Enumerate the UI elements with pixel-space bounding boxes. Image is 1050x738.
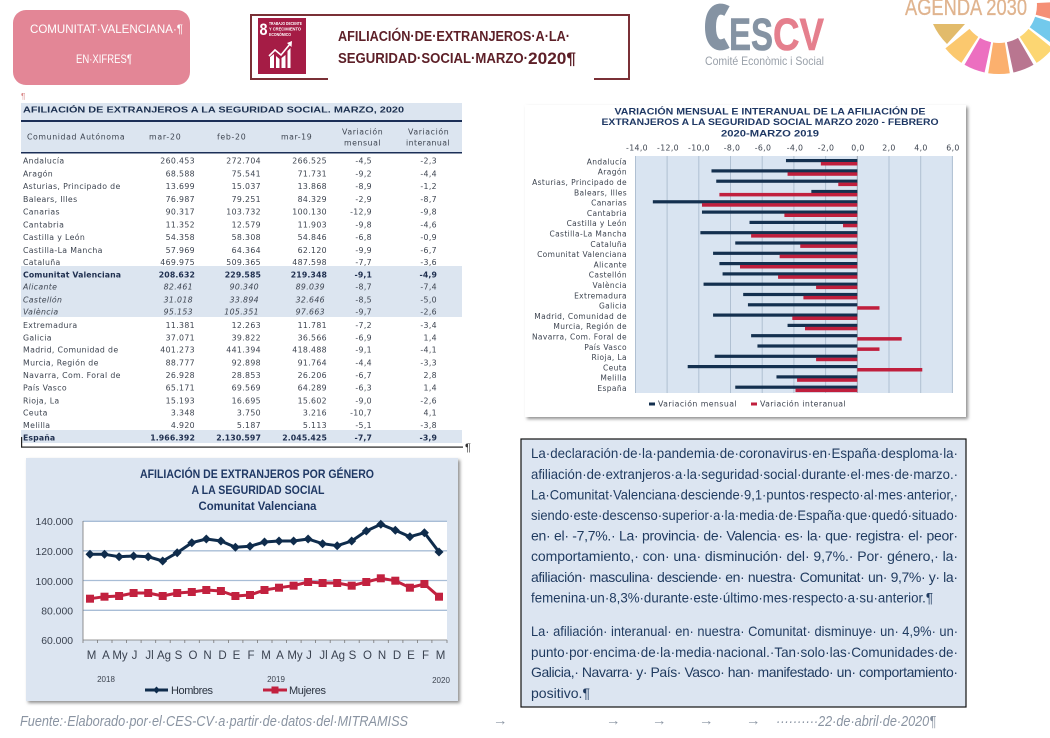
table rows: 68.588 xyxy=(166,169,195,178)
table rows: -3,3 xyxy=(420,359,437,368)
chart title: VARIACIÓN MENSUAL E INTERANUAL DE LA AFILIACIÓN DE xyxy=(614,106,926,118)
table rows: -5,0 xyxy=(420,295,437,304)
month labels: F xyxy=(247,650,255,662)
heading: AFILIACIÓN·DE·EXTRANJEROS·A·LA· xyxy=(338,27,570,45)
chart title: EXTRANJEROS A LA SEGURIDAD SOCIAL MARZO 2020 - FEBRERO xyxy=(602,117,938,128)
table rows: -9,1 xyxy=(355,346,372,355)
table rows: 2.130.597 xyxy=(216,434,261,443)
table rows: -6,7 xyxy=(420,246,437,255)
text block: analysis: siendo·este·descenso·superior·a·la·media·de·España·que·quedó·situado· xyxy=(531,507,958,523)
table rows: Castilla-La Mancha xyxy=(23,246,103,255)
table rows: -4,6 xyxy=(420,220,437,229)
panel: bar chart of monthly and year-on-year variation xyxy=(525,105,968,419)
month labels: D xyxy=(218,650,227,662)
category labels: València xyxy=(593,281,627,290)
footer: source and date: → xyxy=(493,713,508,729)
table rows: -3,4 xyxy=(420,321,437,330)
y axis labels: 100.000 xyxy=(35,577,73,588)
table rows: País Vasco xyxy=(23,384,67,393)
table rows: -0,9 xyxy=(420,233,437,242)
category labels: Cantabria xyxy=(587,209,627,218)
table rows: 89.039 xyxy=(296,283,325,292)
table rows: 65.171 xyxy=(166,384,195,393)
table header: Variación xyxy=(342,128,383,136)
table rows: -9,7 xyxy=(355,308,372,317)
category labels: Balears, Illes xyxy=(574,188,627,197)
table rows: Castilla y León xyxy=(23,233,85,242)
table rows: 88.777 xyxy=(166,359,195,368)
table rows: 64.289 xyxy=(298,384,327,393)
month labels: My xyxy=(112,650,128,662)
table rows: 418.488 xyxy=(292,346,327,355)
month labels: O xyxy=(363,650,372,662)
table rows: -6,8 xyxy=(355,233,372,242)
table rows: 3.216 xyxy=(303,409,327,418)
table rows: Cantabria xyxy=(23,220,64,229)
y axis labels: 120.000 xyxy=(35,547,73,558)
table rows: 64.364 xyxy=(232,246,261,255)
plot area xyxy=(83,521,447,640)
month labels: S xyxy=(175,650,183,662)
category labels: Ceuta xyxy=(603,363,627,372)
table rows: 100.130 xyxy=(292,208,327,216)
icon: SDG 8 decent work and economic growth xyxy=(258,18,306,74)
table rows: Alicante xyxy=(22,283,57,292)
table rows: 71.731 xyxy=(298,169,327,178)
table: afiliación por comunidad autónoma: ¶ xyxy=(465,442,471,454)
table rows: 441.394 xyxy=(226,346,261,355)
table rows: 11.381 xyxy=(166,321,195,330)
table rows: Andalucía xyxy=(23,156,64,166)
table rows: 90.317 xyxy=(166,208,195,216)
y axis labels: 140.000 xyxy=(35,517,73,528)
chart title: Comunitat Valenciana xyxy=(198,501,317,513)
category labels: Aragón xyxy=(598,168,627,177)
table header: mar-20 xyxy=(149,132,181,142)
x axis labels: 4,0 xyxy=(914,144,928,152)
y axis labels xyxy=(35,517,73,647)
table rows: 5.113 xyxy=(303,421,327,430)
table rows: -9,8 xyxy=(355,220,372,229)
table rows: -10,7 xyxy=(350,409,372,418)
month labels xyxy=(87,650,445,662)
category labels: Navarra, Com. Foral de xyxy=(532,332,627,342)
table rows: 272.704 xyxy=(226,156,261,166)
table rows: 82.461 xyxy=(164,283,193,292)
table rows: -7,7 xyxy=(355,258,372,267)
table rows: Ceuta xyxy=(23,409,48,418)
month labels: N xyxy=(203,650,212,662)
footer: source and date xyxy=(20,713,936,730)
text block: analysis: La·Comunitat·Valenciana·desciende·9,1·puntos·respecto·al·mes·anterior,· xyxy=(531,486,958,502)
table rows: 15.037 xyxy=(232,182,261,191)
table rows: 26.206 xyxy=(298,371,327,380)
table rows: 260.453 xyxy=(160,156,195,166)
text block: analysis: comportamiento,· con· una· disminución· del· 9,7%.· Por· género,· la· xyxy=(531,548,958,564)
footer: source and date: → xyxy=(606,713,620,729)
table rows: España xyxy=(23,434,55,443)
category labels: Castilla y León xyxy=(567,219,627,228)
month labels: N xyxy=(378,650,386,662)
table rows: Asturias, Principado de xyxy=(23,182,121,191)
table rows: -3,9 xyxy=(420,434,437,443)
table rows: Extremadura xyxy=(23,321,78,330)
logo: CESCV: ES xyxy=(729,9,773,60)
month labels: S xyxy=(349,650,357,662)
category labels: Madrid, Comunidad de xyxy=(534,312,627,321)
y axis labels: 60.000 xyxy=(41,636,73,647)
table rows: 32.646 xyxy=(296,295,325,304)
month labels: M xyxy=(436,650,445,662)
table rows: -9,1 xyxy=(355,270,372,279)
table rows: Aragón xyxy=(23,169,53,178)
panel: line chart by gender xyxy=(26,458,460,703)
table rows: 15.193 xyxy=(166,397,195,406)
text block: analysis: femenina·un·8,3%·durante·este·último·mes·respecto·a·su·anterior.¶ xyxy=(531,590,933,606)
table rows: -4,4 xyxy=(355,359,372,368)
plot area xyxy=(636,156,953,393)
month labels: D xyxy=(393,650,401,662)
icon: SDG 8 decent work and economic growth: ECONÓMICO xyxy=(269,32,292,37)
x axis labels: 6,0 xyxy=(946,144,960,152)
footer: source and date: → xyxy=(699,713,714,729)
category labels: Asturias, Principado de xyxy=(532,178,627,187)
table rows: 37.071 xyxy=(166,334,195,343)
logo: Agenda 2030 wheel xyxy=(905,0,1050,74)
table rows: Balears, Illes xyxy=(23,195,77,204)
table header: Variación xyxy=(408,128,449,136)
table rows: 12.263 xyxy=(232,321,261,330)
table rows: 97.663 xyxy=(296,308,325,317)
table rows: 11.352 xyxy=(166,220,195,229)
table rows: Cataluña xyxy=(23,258,61,267)
table rows: -8,7 xyxy=(420,195,437,204)
table rows: -7,7 xyxy=(355,434,372,443)
table rows: 92.898 xyxy=(232,359,261,368)
year labels xyxy=(97,675,450,685)
table rows: 54.846 xyxy=(298,233,327,242)
table rows: 79.251 xyxy=(232,195,261,204)
table rows: 16.695 xyxy=(232,397,261,406)
table rows: 75.541 xyxy=(232,169,261,178)
table: afiliación por comunidad autónoma xyxy=(21,103,471,454)
icon: SDG 8 decent work and economic growth: Y CRECIMIENTO xyxy=(269,26,302,32)
table rows: 219.348 xyxy=(291,270,327,279)
heading: SEGURIDAD·SOCIAL·MARZO· xyxy=(338,51,528,67)
logo: CESCV: CV xyxy=(773,9,824,60)
badge: Comunitat Valenciana en xifres xyxy=(13,10,190,85)
month labels: Jl xyxy=(145,650,154,662)
chart legend xyxy=(145,685,326,697)
table rows: 84.329 xyxy=(298,195,327,204)
chart title: A LA SEGURIDAD SOCIAL xyxy=(192,485,324,497)
table rows: -3,8 xyxy=(420,421,437,430)
table rows: Castellón xyxy=(23,295,62,304)
paragraph mark: ¶ xyxy=(21,92,25,101)
text block: analysis xyxy=(521,439,966,707)
table rows: Melilla xyxy=(23,421,50,430)
category labels: Murcia, Región de xyxy=(553,322,627,331)
heading: 2020¶ xyxy=(528,49,576,68)
table rows: Comunitat Valenciana xyxy=(23,270,121,279)
bars: variación mensual xyxy=(653,159,857,389)
chart title xyxy=(140,468,374,513)
bars: variación interanual xyxy=(702,162,922,392)
month labels: J xyxy=(132,650,137,662)
month labels: A xyxy=(276,650,284,662)
icon: SDG 8 decent work and economic growth: 8 xyxy=(260,20,268,39)
x axis labels: -12,0 xyxy=(657,144,679,152)
month labels: M xyxy=(261,650,271,662)
table header: interanual xyxy=(406,138,450,148)
badge: Comunitat Valenciana en xifres: COMUNITAT·VALENCIANA·¶ xyxy=(30,22,183,36)
table rows: 487.598 xyxy=(292,258,327,267)
x axis labels: 2,0 xyxy=(882,144,896,152)
x axis labels: -2,0 xyxy=(818,144,834,152)
text block: analysis: en· el· -7,7%.· La· provincia· de· Valencia· es· la· que· registra· el· peor· xyxy=(531,528,958,544)
table rows: -9,8 xyxy=(420,208,437,216)
table rows: 90.340 xyxy=(230,283,259,292)
category labels: País Vasco xyxy=(584,343,627,352)
logo: CESCV: Comité Econòmic i Social xyxy=(705,54,824,68)
table header: mar-19 xyxy=(281,132,312,142)
table rows: Murcia, Región de xyxy=(23,359,99,368)
table rows: -8,5 xyxy=(355,295,372,304)
table rows: 31.018 xyxy=(164,295,193,304)
year labels: 2020 xyxy=(432,676,450,685)
table rows: 91.764 xyxy=(298,359,327,368)
table rows: 1,4 xyxy=(424,334,437,343)
x axis labels xyxy=(626,144,960,152)
chart title: AFILIACIÓN DE EXTRANJEROS POR GÉNERO xyxy=(140,468,374,481)
badge: Comunitat Valenciana en xifres: EN·XIFRES¶ xyxy=(76,54,132,66)
table rows: 229.585 xyxy=(225,270,261,279)
table rows: 26.928 xyxy=(166,371,195,380)
table rows: 2.045.425 xyxy=(282,434,327,443)
table rows: -6,7 xyxy=(355,371,372,380)
table rows: Rioja, La xyxy=(23,397,60,406)
table rows: -8,9 xyxy=(355,182,372,191)
table rows: 76.987 xyxy=(166,195,195,204)
x axis labels: -8,0 xyxy=(724,144,740,152)
icon: SDG 8 decent work and economic growth: TRABAJO DECENTE xyxy=(269,21,302,26)
table rows: 3.348 xyxy=(171,409,195,418)
table rows: 103.732 xyxy=(226,208,261,216)
table rows: -7,4 xyxy=(420,283,437,292)
table header: mensual xyxy=(344,138,381,148)
table rows: Madrid, Comunidad de xyxy=(23,346,118,355)
chart legend xyxy=(649,400,846,408)
month labels: M xyxy=(87,650,96,662)
chart legend: Mujeres xyxy=(289,685,326,697)
chart legend: Variación mensual xyxy=(658,400,737,408)
table rows: Galicia xyxy=(23,334,52,343)
table rows: -2,6 xyxy=(420,397,437,406)
table rows: 266.525 xyxy=(292,156,327,166)
table rows: 15.602 xyxy=(298,397,327,406)
chart title xyxy=(602,106,938,140)
table rows: 11.903 xyxy=(298,220,327,229)
table rows: -9,2 xyxy=(355,169,372,178)
category labels: Castellón xyxy=(589,271,627,280)
text block: analysis: La· afiliación· interanual· en· nuestra· Comunitat· disminuye· un· 4,9%· un· xyxy=(531,623,958,639)
table rows: -5,1 xyxy=(355,421,372,430)
footer: source and date: Fuente:·Elaborado·por·el·CES-CV·a·partir·de·datos·del·MITRAMISS xyxy=(20,714,408,730)
table rows: -4,9 xyxy=(420,270,437,279)
table rows: -12,9 xyxy=(350,208,372,216)
x axis labels: -4,0 xyxy=(787,144,803,152)
text block: analysis: positivo.¶ xyxy=(531,685,590,701)
table rows: 1.966.392 xyxy=(150,434,195,443)
table rows: 105.351 xyxy=(224,308,259,317)
category labels: Castilla-La Mancha xyxy=(549,230,627,238)
table title: AFILIACIÓN DE EXTRANJEROS A LA SEGURIDAD SOCIAL. MARZO, 2020 xyxy=(23,104,404,114)
table rows: Canarias xyxy=(23,208,60,216)
text block: analysis: Galicia,· Navarra· y· País· Vasco· han· manifestado· un· comportamiento· xyxy=(531,664,958,680)
month labels: E xyxy=(233,650,241,662)
table rows: 33.894 xyxy=(230,295,259,304)
table rows: 62.120 xyxy=(298,246,327,255)
logo: CESCV xyxy=(705,9,824,68)
text block: analysis: afiliación·de·extranjeros·a·la·seguridad·social·durante·el·mes·de·marzo.· xyxy=(531,466,958,482)
month labels: Ag xyxy=(157,650,171,662)
month labels: A xyxy=(102,650,110,662)
table rows: -1,2 xyxy=(420,182,437,191)
table rows: 1,4 xyxy=(424,384,437,393)
table rows: 4,1 xyxy=(424,409,437,418)
table rows: 13.699 xyxy=(166,182,195,191)
table rows: 509.365 xyxy=(226,258,261,267)
table rows: -8,7 xyxy=(355,283,372,292)
month labels: O xyxy=(189,650,198,662)
table header: Comunidad Autónoma xyxy=(27,132,125,142)
category labels xyxy=(532,157,627,393)
chart title: 2020-MARZO 2019 xyxy=(721,128,819,140)
x axis labels: 0,0 xyxy=(851,144,865,152)
footer: source and date: → xyxy=(746,713,760,729)
table rows: -6,3 xyxy=(355,384,372,393)
category labels: Melilla xyxy=(600,374,627,383)
table rows: València xyxy=(23,308,59,317)
category labels: Rioja, La xyxy=(591,353,627,362)
table rows: 208.632 xyxy=(159,270,195,279)
x axis labels: -14,0 xyxy=(626,144,648,152)
category labels: Alicante xyxy=(594,260,627,269)
table rows: 39.822 xyxy=(232,334,261,343)
table rows: 95.153 xyxy=(164,308,193,317)
table rows: -3,6 xyxy=(420,258,437,267)
category labels: Canarias xyxy=(591,199,627,208)
table rows: 3.750 xyxy=(237,409,261,418)
month labels: E xyxy=(407,650,415,662)
table rows: 401.273 xyxy=(160,346,195,355)
table rows: 28.853 xyxy=(232,371,261,380)
month labels: My xyxy=(287,650,303,662)
table rows: 12.579 xyxy=(232,220,261,229)
table rows: 4.920 xyxy=(171,421,195,430)
table header: feb-20 xyxy=(217,132,246,142)
text block: analysis: La·declaración·de·la·pandemia·de·coronavirus·en·España·desploma·la· xyxy=(531,445,958,461)
chart legend: Variación interanual xyxy=(760,400,846,408)
text block: analysis: afiliación· masculina· desciende· en· nuestra· Comunitat· un· 9,7%· y· la· xyxy=(531,569,958,585)
heading xyxy=(338,27,576,68)
category labels: Cataluña xyxy=(590,240,627,249)
table rows: -6,9 xyxy=(355,334,372,343)
table rows: 58.308 xyxy=(232,233,261,242)
x axis labels: -10,0 xyxy=(688,144,710,152)
table rows: Navarra, Com. Foral de xyxy=(23,371,121,380)
table rows: -2,3 xyxy=(420,156,437,166)
table rows: 57.969 xyxy=(166,246,195,255)
category labels: Extremadura xyxy=(574,291,627,300)
category labels: Andalucía xyxy=(587,157,627,166)
table rows xyxy=(22,156,437,443)
year labels: 2018 xyxy=(97,675,115,684)
table rows: 2,8 xyxy=(424,371,437,380)
month labels: Ag xyxy=(331,650,345,662)
category labels: España xyxy=(597,384,627,393)
table rows: -2,9 xyxy=(355,195,372,204)
title box xyxy=(251,15,629,79)
footer: source and date: ··········22·de·abril·de·2020¶ xyxy=(776,714,936,730)
table rows: 11.781 xyxy=(298,321,327,330)
line: Hombres xyxy=(90,524,439,561)
table rows: -4,5 xyxy=(355,156,372,166)
table rows: 36.566 xyxy=(298,334,327,343)
year labels: 2019 xyxy=(267,675,285,684)
table rows: -4,4 xyxy=(420,169,437,178)
month labels: F xyxy=(422,650,429,662)
text block: analysis: punto·por·encima·de·la·media·nacional.·Tan·solo·las·Comunidades·de· xyxy=(531,644,958,660)
table rows: -2,6 xyxy=(420,308,437,317)
table rows: 13.868 xyxy=(298,182,327,191)
category labels: Galicia xyxy=(599,302,627,311)
table rows: -7,2 xyxy=(355,321,372,330)
table rows: -9,9 xyxy=(355,246,372,255)
month labels: J xyxy=(306,650,312,662)
table rows: -9,0 xyxy=(355,397,372,406)
table header xyxy=(27,128,450,148)
table rows: 5.187 xyxy=(237,421,261,430)
table rows: 69.569 xyxy=(232,384,261,393)
table rows: 469.975 xyxy=(160,258,195,267)
y axis labels: 80.000 xyxy=(41,606,73,618)
table rows: -4,1 xyxy=(420,346,437,355)
footer: source and date: → xyxy=(652,713,666,729)
line: Mujeres xyxy=(90,578,439,599)
x axis labels: -6,0 xyxy=(755,144,771,152)
month labels: Jl xyxy=(319,650,328,662)
category labels: Comunitat Valenciana xyxy=(537,250,627,259)
table rows: 54.358 xyxy=(166,233,195,242)
chart legend: Hombres xyxy=(171,685,214,697)
